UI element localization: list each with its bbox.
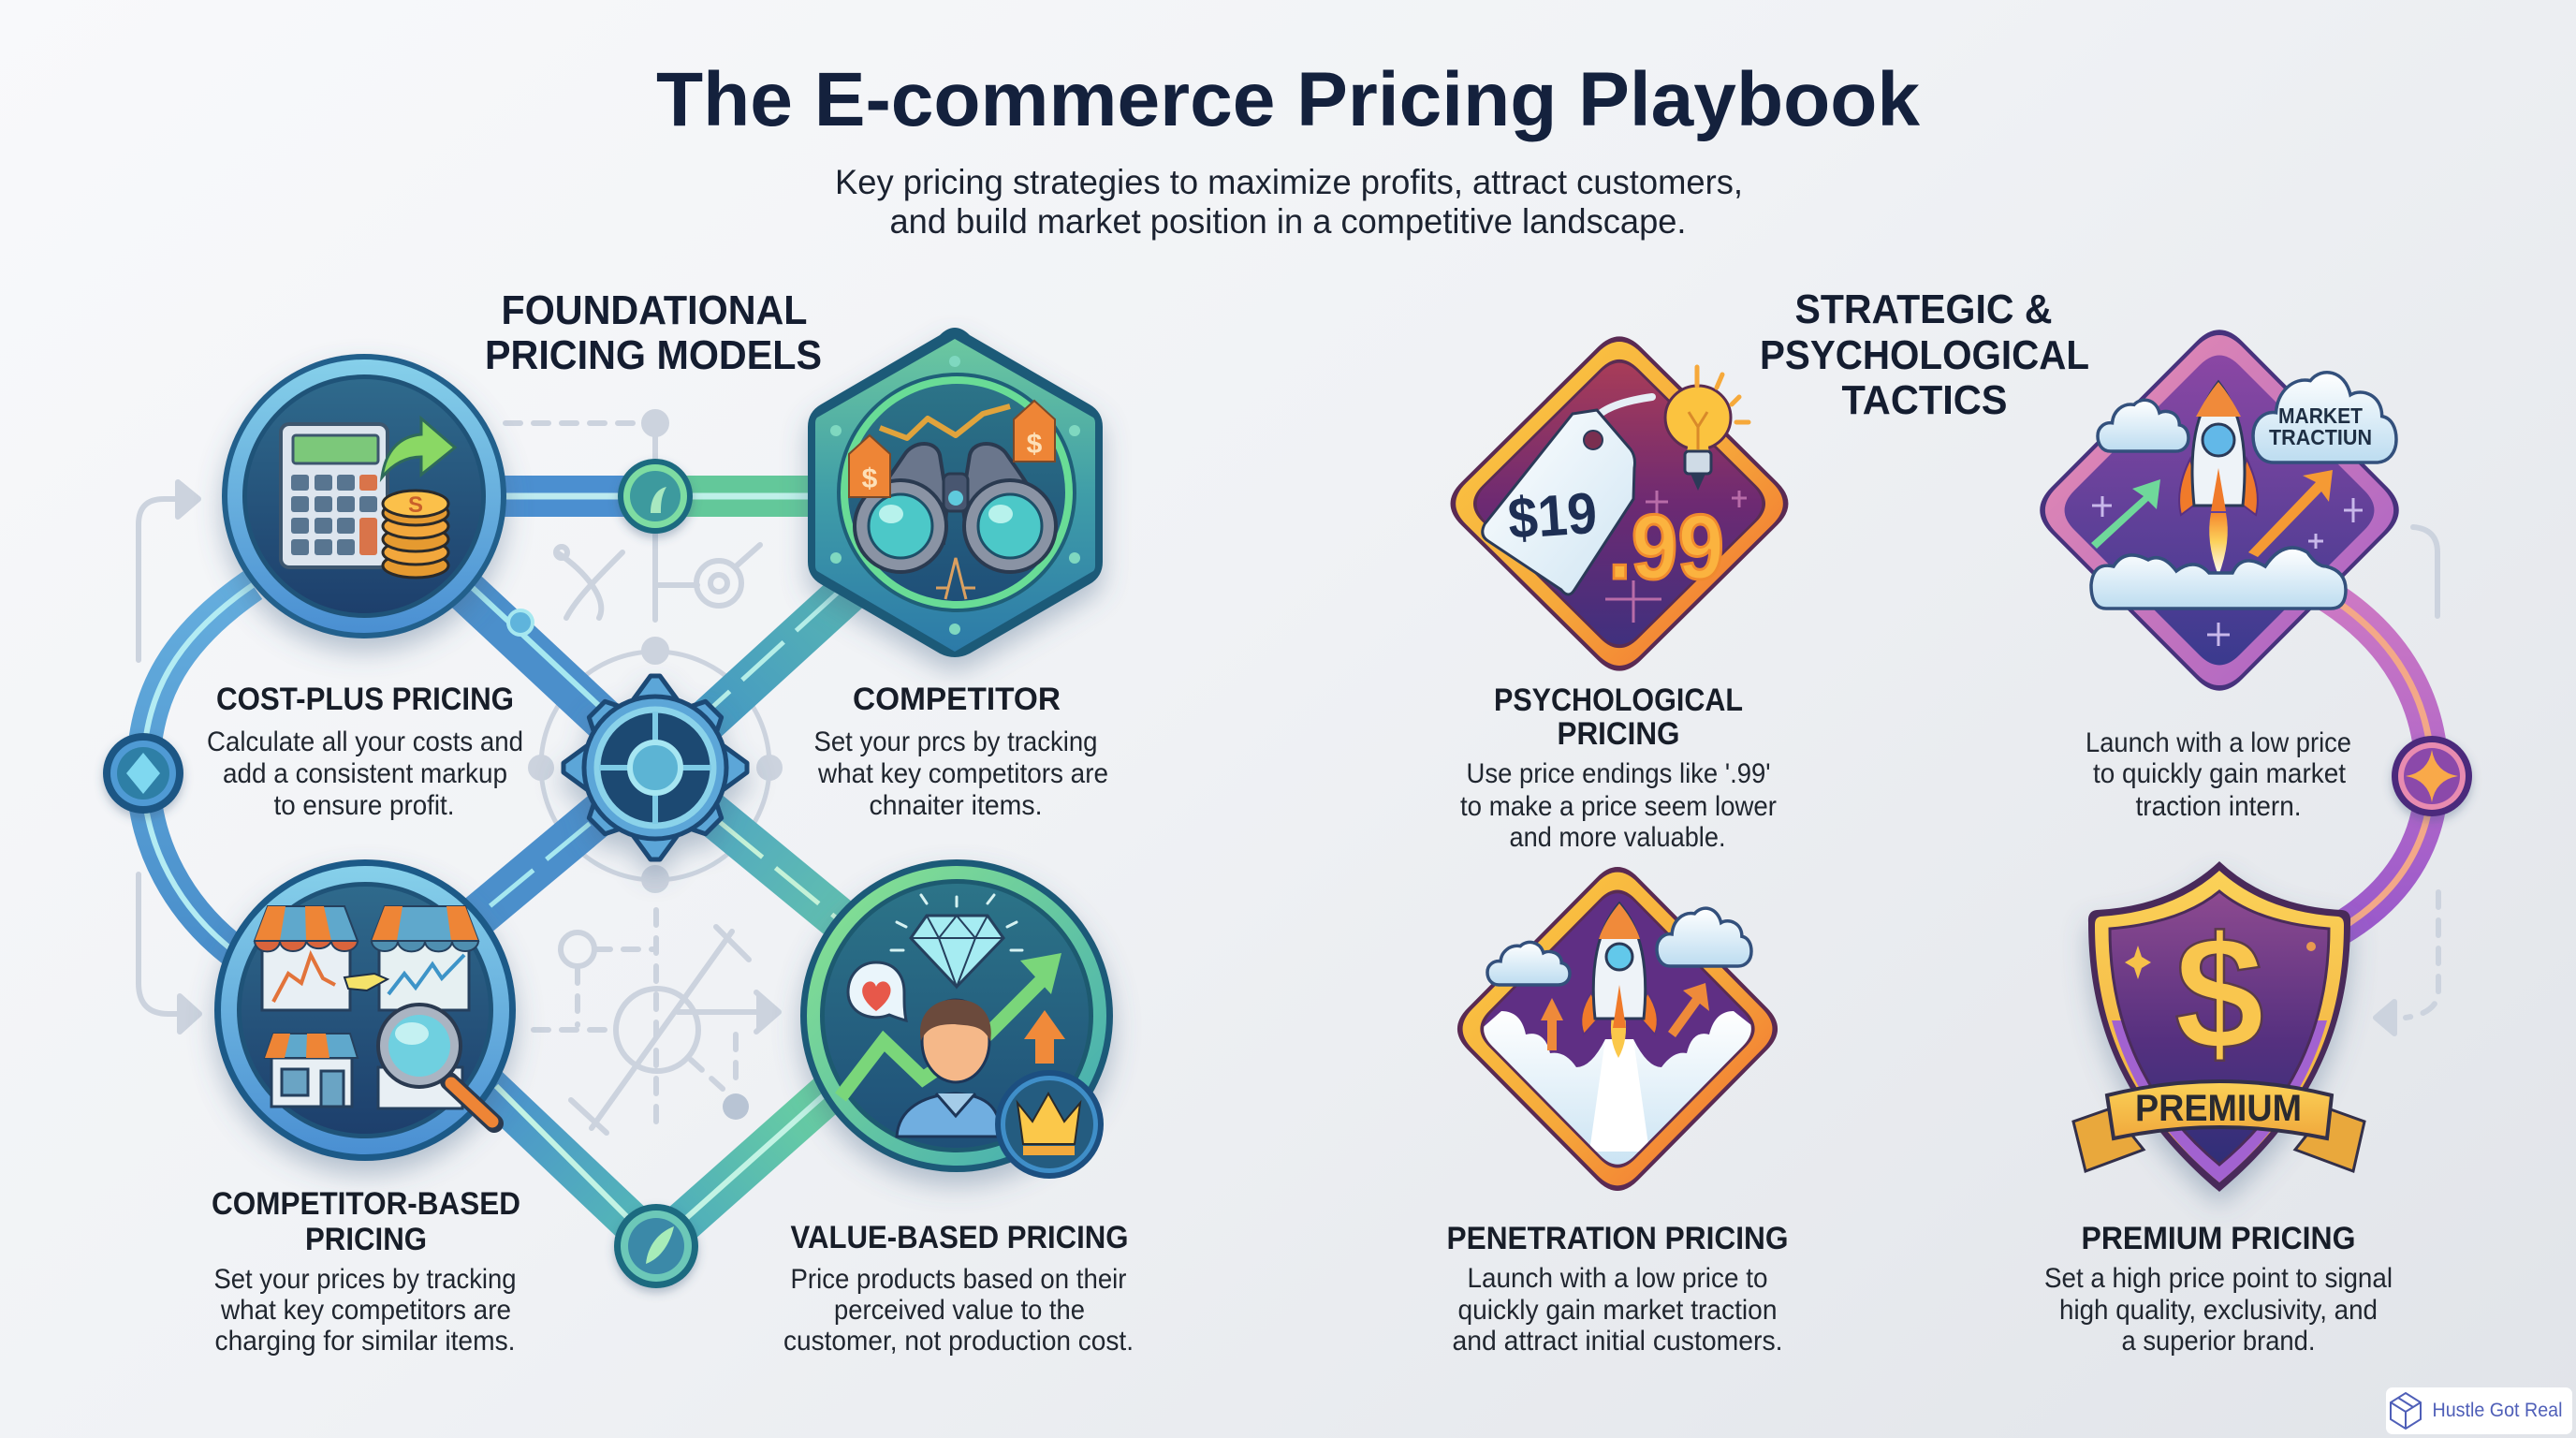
text: competitor-based pricing [212, 1186, 520, 1357]
text: cost-plus pricing: Calculate all your costs and [207, 726, 523, 757]
text: cost-plus pricing: add a consistent markup [223, 758, 507, 789]
ghost sketch: lower blueprint [534, 910, 779, 1133]
icon: left price tag: $ [862, 463, 878, 494]
subtitle: Key pricing strategies to maximize profits, attract customers, [835, 163, 1743, 201]
text: penetration pricing: quickly gain market traction [1458, 1295, 1777, 1326]
text: competitor: what key competitors are [817, 758, 1108, 789]
node: bottom link [614, 1204, 698, 1288]
icon: price tag [1483, 397, 1652, 594]
icon: magnifier [378, 1005, 494, 1123]
icon: price ending: .99 [1608, 495, 1724, 598]
icon: left price tag [849, 435, 890, 497]
text: premium pricing: a superior brand. [2121, 1326, 2316, 1357]
text: value-based pricing: customer, not production cost. [783, 1326, 1134, 1357]
icon: price chart line [880, 406, 1010, 438]
icon: heart speech bubble [848, 962, 906, 1020]
node: right loop [2392, 736, 2472, 816]
connector: bottom vee [477, 1077, 847, 1246]
text: competitor-based pricing: PRICING [305, 1222, 427, 1257]
icon: green arrow [2091, 479, 2160, 549]
text: market traction blurb: Launch with a low price [2086, 727, 2351, 758]
connector: right loop [2321, 592, 2432, 929]
text: competitor: Set your prcs by tracking [814, 726, 1097, 757]
text: competitor-based pricing: COMPETITOR-BASED [212, 1186, 520, 1222]
icon: shop with rising chart [372, 906, 478, 1010]
badge: value-based pricing [800, 859, 1113, 1179]
text: psychological pricing: PRICING [1558, 716, 1679, 752]
ghost arrow: right upper [2413, 527, 2437, 616]
heading: strategic and psychological tactics: PSYCHOLOGICAL [1760, 332, 2089, 378]
icon: price tag: $19 [1506, 481, 1599, 551]
text: market traction blurb: to quickly gain market [2093, 758, 2347, 789]
title: The E-commerce Pricing Playbook [656, 57, 1920, 142]
text: value-based pricing: VALUE-BASED PRICING [790, 1220, 1129, 1255]
badge: cost-plus pricing [222, 354, 506, 638]
badge: penetration pricing [1457, 867, 1778, 1208]
badge: psychological pricing [1451, 336, 1788, 671]
text: value-based pricing: perceived value to the [834, 1295, 1085, 1326]
heading: strategic and psychological tactics [1760, 286, 2089, 423]
text: premium pricing: PREMIUM PRICING [2082, 1221, 2355, 1256]
text: cost-plus pricing: COST-PLUS PRICING [216, 682, 514, 717]
icon: orange arrow [2248, 470, 2333, 557]
node: left loop [103, 733, 183, 814]
icon: shop with falling chart [255, 906, 358, 1010]
icon: person [897, 999, 1002, 1137]
icon: right cloud [1657, 908, 1751, 966]
text: market traction blurb: traction intern. [2136, 791, 2301, 822]
connector: cross links through hub [364, 494, 957, 1016]
badge: competitor-based pricing [214, 859, 516, 1161]
icon: market traction cloud: MARKET [2278, 404, 2363, 428]
icon: green growth arrow [841, 953, 1061, 1097]
text: penetration pricing: Launch with a low price to [1468, 1263, 1767, 1294]
watermark [2386, 1387, 2572, 1434]
text: competitor-based pricing: Set your prices by tracking [213, 1264, 517, 1295]
badge: premium shield [2073, 861, 2364, 1192]
heading: strategic and psychological tactics: STRATEGIC & [1795, 286, 2052, 332]
text: psychological pricing: and more valuable. [1509, 822, 1726, 853]
icon: dollar sign: $ [2174, 903, 2264, 1083]
icon: rocket [1581, 903, 1658, 1058]
badge: market traction rocket [2040, 330, 2399, 691]
text: cost-plus pricing: to ensure profit. [273, 790, 455, 821]
text: value-based pricing: Price products based on their [790, 1264, 1127, 1295]
ghost arrow: upper left [139, 482, 198, 660]
text: competitor: chnaiter items. [869, 790, 1043, 821]
icon: coin stack [383, 491, 448, 578]
icon: rocket [2179, 382, 2258, 576]
icon: diamond [891, 895, 1022, 987]
text: psychological pricing: to make a price seem lower [1460, 791, 1777, 822]
node: top link [618, 459, 693, 534]
heading: foundational pricing models: PRICING MODELS [485, 332, 822, 378]
badge: cost-plus pricing: S [408, 492, 423, 518]
icon: market traction cloud: TRACTIUN [2269, 425, 2372, 449]
connector: horizontal link [364, 476, 955, 517]
connector: left loop [143, 585, 253, 960]
text: value-based pricing [783, 1220, 1134, 1357]
text: psychological pricing [1460, 682, 1777, 853]
text: competitor [814, 682, 1108, 821]
icon: arrows [1541, 983, 1709, 1050]
text: premium pricing: high quality, exclusivity, and [2059, 1295, 2378, 1326]
icon: premium ribbon: PREMIUM [2135, 1088, 2302, 1129]
ghost sketch: upper blueprint [505, 412, 780, 890]
icon: left cloud [2098, 400, 2188, 451]
text: penetration pricing: and attract initial customers. [1453, 1326, 1782, 1357]
text: competitor-based pricing: what key competitors are [220, 1295, 511, 1326]
text: premium pricing [2044, 1221, 2393, 1357]
icon: binoculars [855, 444, 1056, 572]
ghost arrow: right lower [2376, 892, 2438, 1034]
text: competitor: COMPETITOR [853, 682, 1061, 717]
text: premium pricing: Set a high price point to signal [2044, 1263, 2393, 1294]
hub gear [564, 676, 747, 859]
icon: right price tag [1014, 401, 1055, 462]
icon: left cloud [1487, 942, 1570, 985]
heading: foundational pricing models [485, 287, 822, 378]
icon: green arrow [382, 418, 455, 477]
watermark: Hustle Got Real [2432, 1400, 2563, 1421]
text: penetration pricing [1447, 1221, 1788, 1357]
icon: right price tag: $ [1027, 429, 1043, 460]
text: psychological pricing: PSYCHOLOGICAL [1494, 682, 1743, 718]
text: psychological pricing: Use price endings like '.99' [1466, 758, 1771, 789]
ghost arrow: lower left [139, 874, 199, 1032]
heading: foundational pricing models: FOUNDATIONAL [502, 287, 807, 333]
icon: calculator [281, 424, 388, 567]
icon: up arrow [1024, 1010, 1065, 1064]
text: penetration pricing: PENETRATION PRICING [1447, 1221, 1788, 1256]
badge: competitor [808, 328, 1103, 657]
subtitle: and build market position in a competitive landscape. [889, 202, 1687, 241]
icon: premium ribbon [2073, 1081, 2364, 1171]
text: competitor-based pricing: charging for similar items. [215, 1326, 515, 1357]
text: cost-plus pricing [207, 682, 523, 821]
subtitle [835, 163, 1743, 241]
icon: light bulb [1665, 367, 1749, 491]
icon: launch smoke [2091, 548, 2346, 609]
icon: market traction cloud [2253, 373, 2396, 462]
heading: strategic and psychological tactics: TACTICS [1842, 377, 2007, 423]
text: market traction blurb [2086, 727, 2351, 822]
icon: crown badge [995, 1070, 1104, 1179]
icon: smoke plume [1484, 1011, 1751, 1165]
icon: storefront [265, 1034, 358, 1107]
